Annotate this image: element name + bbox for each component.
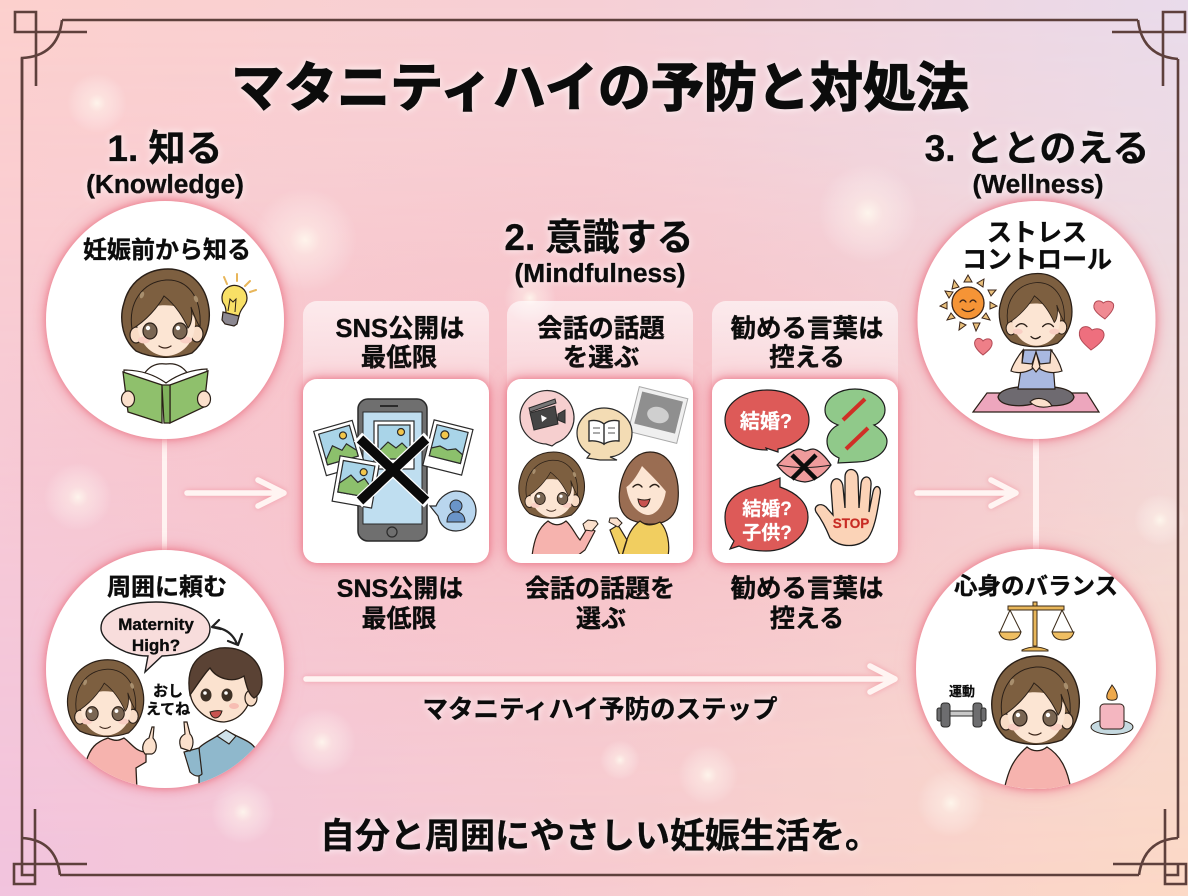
yoga mat	[973, 393, 1099, 412]
illustration: phone with crossed-out photos	[314, 399, 476, 541]
heading: step 2	[504, 217, 694, 288]
icon: turn-taking arrows	[212, 620, 242, 645]
connector: right column	[1033, 430, 1039, 560]
closing message: 自分と周囲にやさしい妊娠生活を。	[320, 817, 880, 856]
caption: 選ぶ	[576, 605, 626, 633]
speech bubble: Maternity	[118, 615, 194, 634]
card heading: 勧める言葉は	[730, 315, 884, 343]
panel: SNS公開は最低限	[303, 301, 489, 633]
caption	[525, 575, 675, 633]
icon: balance scale	[999, 602, 1074, 651]
girl talking	[519, 452, 598, 556]
panel: 会話の話題を選ぶ	[507, 301, 693, 633]
card heading	[336, 315, 464, 372]
icon: sun	[940, 275, 997, 331]
smiling head	[999, 273, 1072, 347]
red double question bubble: 結婚?	[742, 498, 792, 520]
reply text: おし	[153, 683, 183, 700]
arrow: knowledge to mindfulness	[187, 480, 284, 506]
caption: 会話の話題を	[525, 575, 675, 603]
icon: dumbbell with label	[937, 684, 986, 727]
heading: step 2: 2. 意識する	[504, 217, 694, 258]
book	[123, 369, 208, 423]
stop hand	[815, 470, 880, 546]
heading: step 3	[925, 128, 1149, 199]
red double question bubble: 子供?	[742, 522, 792, 544]
panel: ストレスコントロール	[918, 201, 1156, 439]
red double question bubble	[725, 478, 808, 551]
icon: candle	[1091, 685, 1133, 734]
card heading	[537, 315, 665, 372]
ultrasound photo	[628, 387, 688, 443]
icon: hearts	[975, 299, 1115, 355]
red speech bubble	[725, 390, 809, 452]
book bubble	[577, 408, 632, 460]
label: 周囲に頼む	[107, 574, 227, 601]
illustration: choosing conversation topics	[519, 387, 688, 556]
heading: step 1: (Knowledge)	[86, 169, 244, 199]
caption: 最低限	[361, 605, 437, 633]
panel: 妊娠前から知る	[46, 201, 284, 439]
arrow: mindfulness to wellness	[917, 480, 1016, 506]
label: 妊娠前から知る	[83, 237, 251, 264]
meditating character	[973, 273, 1099, 412]
card heading	[730, 315, 884, 372]
heading: step 2: (Mindfulness)	[515, 258, 685, 288]
stop hand: STOP	[833, 516, 869, 531]
panel: 周囲に頼む	[46, 550, 284, 790]
heading: step 1	[86, 128, 244, 199]
icon: dumbbell with label: 運動	[949, 684, 975, 699]
heading: step 3: (Wellness)	[972, 169, 1104, 199]
video bubble	[520, 391, 574, 446]
man head	[189, 648, 262, 722]
caption: 勧める言葉は	[730, 575, 884, 603]
character reading	[122, 269, 210, 423]
card heading: を選ぶ	[563, 344, 639, 372]
character	[992, 656, 1079, 790]
card heading: 最低限	[361, 344, 437, 372]
caption	[337, 575, 463, 633]
lips crossed out	[777, 449, 831, 482]
title: マタニティハイの予防と対処法	[231, 59, 969, 118]
caption	[730, 575, 884, 633]
arrow: prevention steps	[306, 666, 895, 692]
panel: 心身のバランス	[916, 549, 1156, 790]
reply text: えてね	[146, 701, 190, 718]
person bubble	[430, 491, 476, 531]
card heading: SNS公開は	[336, 315, 464, 343]
panel: 勧める言葉は控える	[712, 301, 898, 633]
speech bubble	[101, 602, 210, 672]
speech bubble: High?	[132, 636, 180, 655]
label: 心身のバランス	[954, 573, 1118, 599]
label	[962, 219, 1112, 274]
reply text	[146, 683, 190, 718]
heading: step 1: 1. 知る	[107, 128, 223, 169]
label: コントロール	[962, 246, 1112, 274]
caption: SNS公開は	[337, 575, 463, 603]
green speech bubble with slashes	[825, 389, 887, 463]
characters talking	[68, 648, 262, 790]
illustration: words to avoid	[725, 389, 887, 551]
connector: left column	[162, 430, 167, 560]
card heading: 控える	[769, 344, 845, 372]
red speech bubble: 結婚?	[740, 410, 792, 433]
label: ストレス	[987, 219, 1087, 247]
icon: light bulb	[222, 274, 256, 326]
caption: 控える	[770, 605, 844, 633]
step caption: マタニティハイ予防のステップ	[423, 696, 777, 724]
heading: step 3: 3. ととのえる	[925, 128, 1149, 169]
card heading: 会話の話題	[537, 315, 665, 343]
woman talking	[609, 452, 678, 556]
